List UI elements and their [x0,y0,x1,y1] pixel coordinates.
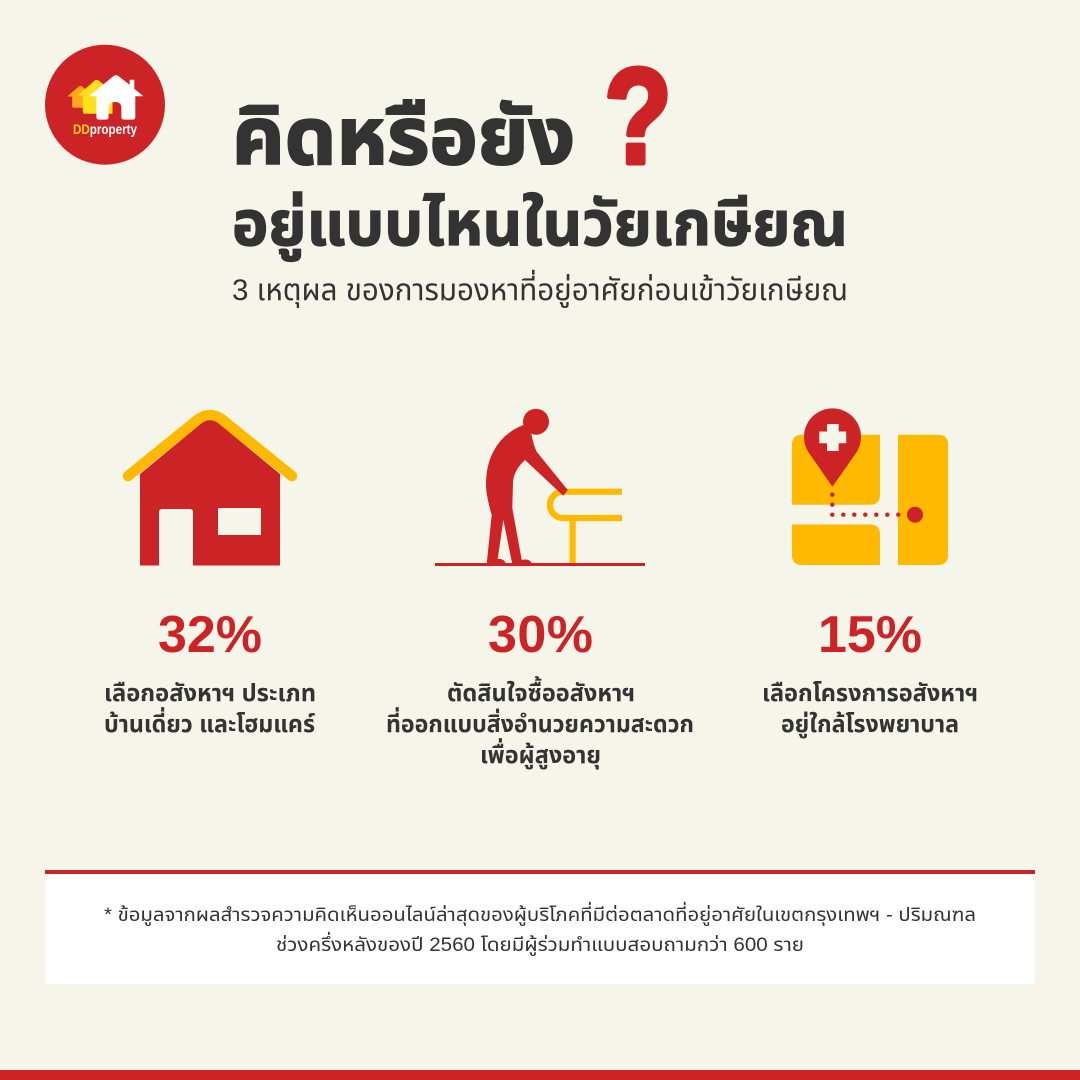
title: first line: คิดหรือยัง [232,92,575,181]
logo: DDproperty: DDproperty [73,121,137,137]
text: reason 2: ที่ออกแบบสิ่งอำนวยความสะดวก [386,707,694,738]
footnote text: ช่วงครึ่งหลังของปี 2560 โดยมีผู้ร่วมทำแบบสอบถามกว่า 600 ราย [276,931,804,957]
panel: footnote [45,870,1035,984]
icon: elderly person at handrail [435,409,645,566]
footnote text [104,901,976,957]
statistic: 15 percent: 15% [818,606,922,664]
text: reason 1: เลือกอสังหาฯ ประเภท [104,680,316,707]
footnote text: * ข้อมูลจากผลสำรวจความคิดเห็นออนไลน์ล่าสุดของผู้บริโภคที่มีต่อตลาดที่อยู่อาศัยในเขตกรุงเทพฯ - ปริมณฑล [104,901,976,927]
text: reason 1: บ้านเดี่ยว และโฮมแคร์ [104,707,315,738]
logo: DDproperty [45,45,165,165]
icon: hospital map pin [792,408,948,565]
bottom bar [0,1070,1080,1080]
text: reason 2: ตัดสินใจซื้ออสังหาฯ [447,676,635,707]
text: reason 2 [386,676,694,770]
text: reason 3 [762,680,978,739]
text: reason 2: เพื่อผู้สูงอายุ [480,738,601,770]
subtitle: 3 เหตุผล ของการมองหาที่อยู่อาศัยก่อนเข้าวัยเกษียณ [232,269,848,308]
text: reason 1 [104,680,316,738]
statistic: 30 percent: 30% [488,606,593,664]
text: reason 3: อยู่ใกล้โรงพยาบาล [781,710,959,739]
title: question mark: ? [604,40,672,192]
statistic: 32 percent: 32% [158,606,262,664]
text: reason 3: เลือกโครงการอสังหาฯ [762,680,978,707]
icon: house [128,415,292,566]
title: second line: อยู่แบบไหนในวัยเกษียณ [232,190,848,262]
